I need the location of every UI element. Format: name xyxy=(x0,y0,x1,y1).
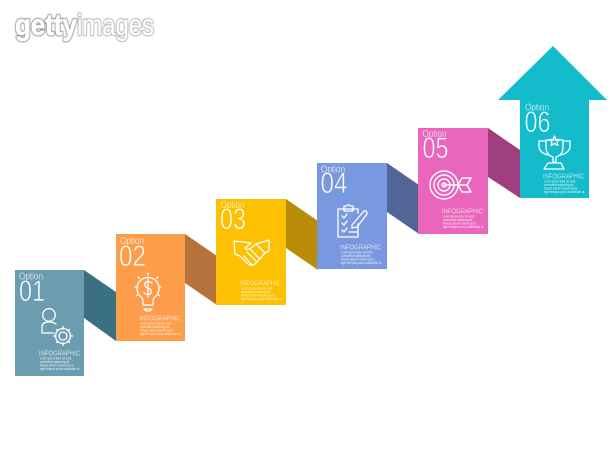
ribbon connector 5 to 6 xyxy=(488,128,520,198)
option 02 label: Option xyxy=(120,236,144,247)
icon: person with gear xyxy=(42,309,72,346)
watermark: gettyimages xyxy=(15,9,154,42)
option 06 text block: INFOGRAPHIC xyxy=(543,172,584,180)
option 03 text block: Lorem ipsum dolor sit amet, xyxy=(241,286,273,290)
option 03 text block: INFOGRAPHIC xyxy=(240,278,281,288)
option 01 text block: consectetur adipiscing elit. xyxy=(40,360,70,364)
option 02 number: 02 xyxy=(119,240,146,273)
panel: option 06 arrow xyxy=(498,46,607,198)
watermark: gettyimages: images xyxy=(77,9,154,42)
ribbon connector 4 to 5 xyxy=(387,163,419,234)
panel: option 04 xyxy=(317,163,387,269)
watermark: gettyimages: getty xyxy=(15,9,77,42)
ribbon connector 1 to 2 xyxy=(84,270,116,341)
option 03 text block: eget tempus purus sollicitudin ut. xyxy=(241,297,282,301)
option 05 number: 05 xyxy=(422,132,448,165)
option 03 number: 03 xyxy=(220,203,246,236)
option 01 label: Option xyxy=(19,272,43,282)
option 01 text block: INFOGRAPHIC xyxy=(39,348,80,358)
option 04 text block: eget tempus purus sollicitudin ut. xyxy=(341,261,382,265)
option 04 text block: Mauris dictum mauris lorem, xyxy=(341,258,375,262)
panel: option 03 xyxy=(216,199,286,305)
option 01 text block: Mauris dictum mauris lorem, xyxy=(40,364,74,368)
panel: option 05 xyxy=(418,128,488,234)
option 03 text block xyxy=(240,278,282,301)
option 06 text block: consectetur adipiscing elit. xyxy=(544,183,574,187)
option 02 text block xyxy=(140,314,181,336)
option 02 text block: consectetur adipiscing elit. xyxy=(140,325,170,329)
option 05 text block xyxy=(442,206,484,229)
panel: option 02 xyxy=(116,234,185,341)
option 02 text block: Lorem ipsum dolor sit amet, xyxy=(140,322,172,326)
icon: clipboard with pen xyxy=(338,204,367,237)
icon: handshake xyxy=(234,240,269,265)
option 06 text block xyxy=(543,172,585,194)
option 06 number: 06 xyxy=(524,106,550,139)
option 06 label: Option xyxy=(525,102,549,114)
watermark: gettyimages: getty xyxy=(15,9,77,42)
icon: target with arrow xyxy=(430,171,471,199)
option 02 text block: Mauris dictum mauris lorem, xyxy=(140,328,174,332)
option 04 text block: consectetur adipiscing elit. xyxy=(341,254,371,258)
option 01 text block xyxy=(39,348,80,371)
option 05 label: Option xyxy=(422,129,446,140)
option 04 text block: Lorem ipsum dolor sit amet, xyxy=(341,250,373,254)
option 05 text block: INFOGRAPHIC xyxy=(442,206,483,216)
option 01 text block: eget tempus purus sollicitudin ut. xyxy=(40,367,80,371)
watermark: gettyimages: images xyxy=(77,9,154,42)
icon: light bulb with dollar xyxy=(135,273,161,311)
option 04 label: Option xyxy=(321,164,345,176)
option 06 text block: Lorem ipsum dolor sit amet, xyxy=(544,180,576,184)
option 03 label: Option xyxy=(220,200,244,211)
option 04 number: 04 xyxy=(320,167,348,200)
option 02 text block: INFOGRAPHIC xyxy=(140,314,181,322)
option 05 text block: Lorem ipsum dolor sit amet, xyxy=(443,214,475,218)
option 05 text block: eget tempus purus sollicitudin ut. xyxy=(443,225,484,229)
option 04 text block xyxy=(340,242,382,265)
option 06 text block: eget tempus purus sollicitudin ut. xyxy=(544,190,585,194)
panel: option 01 xyxy=(15,270,84,376)
icon: trophy xyxy=(539,136,570,169)
ribbon connector 3 to 4 xyxy=(286,199,318,270)
option 02 text block: eget tempus purus sollicitudin ut. xyxy=(140,332,181,336)
option 05 text block: Mauris dictum mauris lorem, xyxy=(443,222,477,226)
option 01 text block: Lorem ipsum dolor sit amet, xyxy=(40,356,72,360)
option 05 text block: consectetur adipiscing elit. xyxy=(443,218,473,222)
ribbon connector 2 to 3 xyxy=(185,234,217,305)
option 01 number: 01 xyxy=(19,275,45,308)
option 03 text block: consectetur adipiscing elit. xyxy=(241,290,271,294)
option 04 text block: INFOGRAPHIC xyxy=(340,242,381,252)
option 06 text block: Mauris dictum mauris lorem, xyxy=(544,186,578,190)
option 03 text block: Mauris dictum mauris lorem, xyxy=(241,294,275,298)
